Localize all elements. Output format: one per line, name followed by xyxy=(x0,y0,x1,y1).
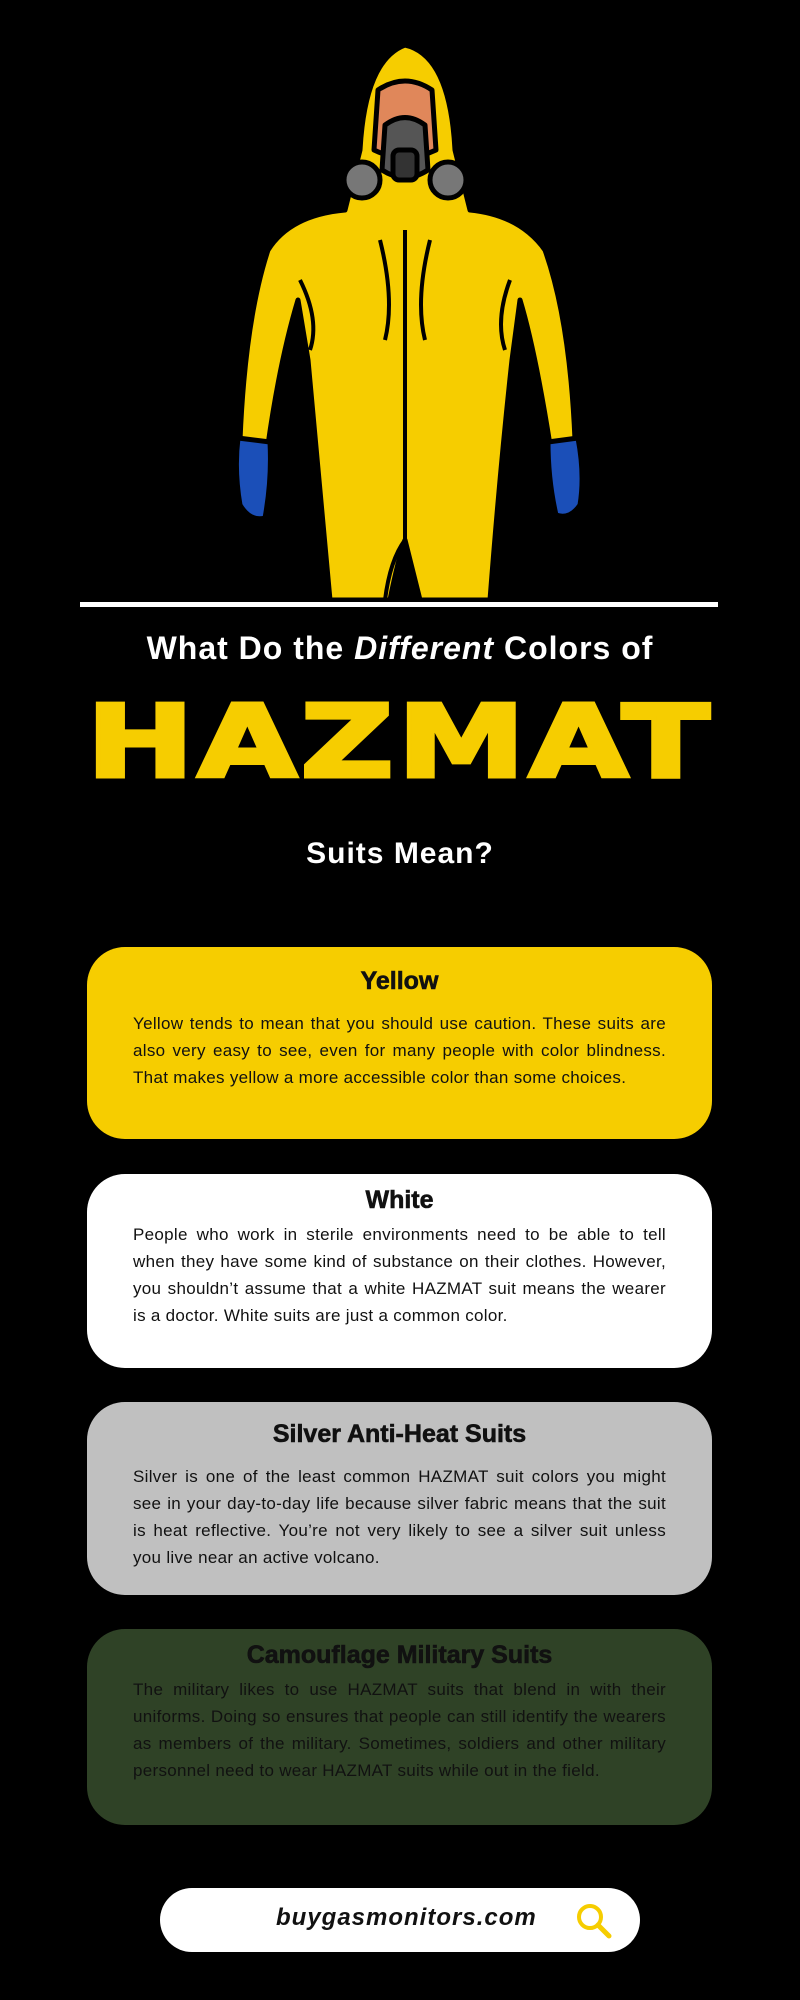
footer: website pill xyxy=(160,1888,640,1952)
title: Suits Mean? xyxy=(306,837,494,870)
title: What Do the Different Colors of xyxy=(147,630,653,666)
panel: camouflage: The military likes to use HAZMAT suits that blend in with their uniforms. Doing so ensures that people can still identify the wearers as members of the military. Sometimes, soldiers and other military personnel need to wear HAZMAT suits while out in the field. xyxy=(133,1680,666,1780)
panel: silver xyxy=(87,1402,712,1595)
panel: white xyxy=(87,1174,712,1368)
panel: camouflage: Camouflage Military Suits xyxy=(247,1641,552,1669)
gas mask xyxy=(382,118,428,178)
icon: magnifier xyxy=(577,1904,612,1938)
panel: silver: Silver is one of the least common HAZMAT suit colors you might see in your day-to-day life because silver fabric means that the suit is heat reflective. You’re not very likely to see a silver suit unless you live near an active volcano. xyxy=(133,1467,666,1567)
divider line xyxy=(80,602,718,607)
panel: silver: Silver Anti-Heat Suits xyxy=(273,1420,526,1448)
panel: yellow: Yellow xyxy=(361,967,438,995)
suit body xyxy=(236,45,582,600)
panel: yellow: Yellow tends to mean that you should use caution. These suits are also very easy to see, even for many people with color blindness. That makes yellow a more accessible color than some choices. xyxy=(133,1014,666,1087)
panel: white: White xyxy=(365,1186,434,1214)
gloves xyxy=(236,438,270,519)
panel: camouflage xyxy=(87,1629,712,1825)
footer: website pill: buygasmonitors.com xyxy=(276,1904,537,1931)
title: HAZMAT xyxy=(87,684,713,801)
illustration: hazmat suit figure xyxy=(238,48,580,598)
face xyxy=(374,81,436,158)
panel: yellow xyxy=(87,947,712,1139)
title xyxy=(87,630,713,870)
panel: white: People who work in sterile environments need to be able to tell when they have some kind of substance on their clothes. However, you shouldn’t assume that a white HAZMAT suit means the wearer is a doctor. White suits are just a common color. xyxy=(133,1225,666,1325)
